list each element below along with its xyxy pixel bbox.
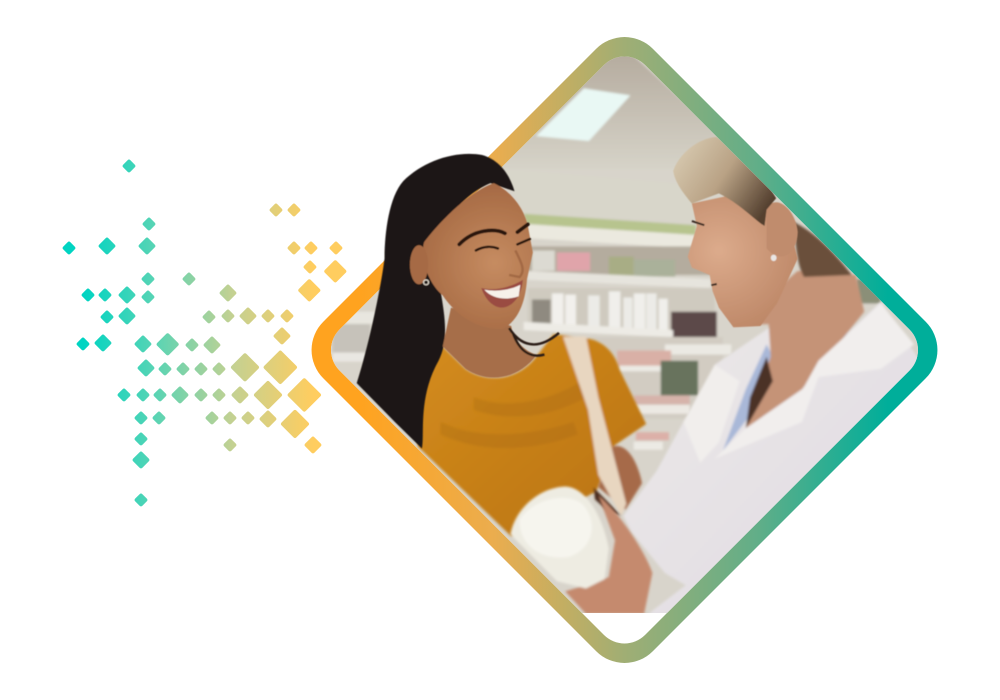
diamond inner white area [319, 45, 930, 655]
long dark hair [357, 154, 515, 449]
face [423, 183, 533, 329]
woman's shirt and bag strap [418, 334, 646, 536]
pharmacy shelves background [331, 56, 918, 613]
pharmacist's head [673, 137, 798, 327]
hair strands at shoulder [509, 328, 559, 356]
teeth [484, 285, 520, 299]
decorative diamond dot pattern [65, 162, 344, 504]
eyes [476, 239, 530, 250]
pill bottle and hand [510, 486, 652, 614]
earring [424, 280, 429, 285]
smile [481, 280, 523, 308]
infographic canvas [62, 37, 938, 663]
gradient diamond frame [295, 20, 954, 680]
nose shadow [509, 250, 523, 277]
pharmacist with white coat [623, 222, 922, 618]
neck [443, 308, 537, 378]
ear [410, 245, 428, 284]
eyebrows [459, 224, 528, 244]
photo: pharmacy background and people [331, 56, 918, 613]
woman's head and hair overlapping the frame [357, 154, 559, 449]
